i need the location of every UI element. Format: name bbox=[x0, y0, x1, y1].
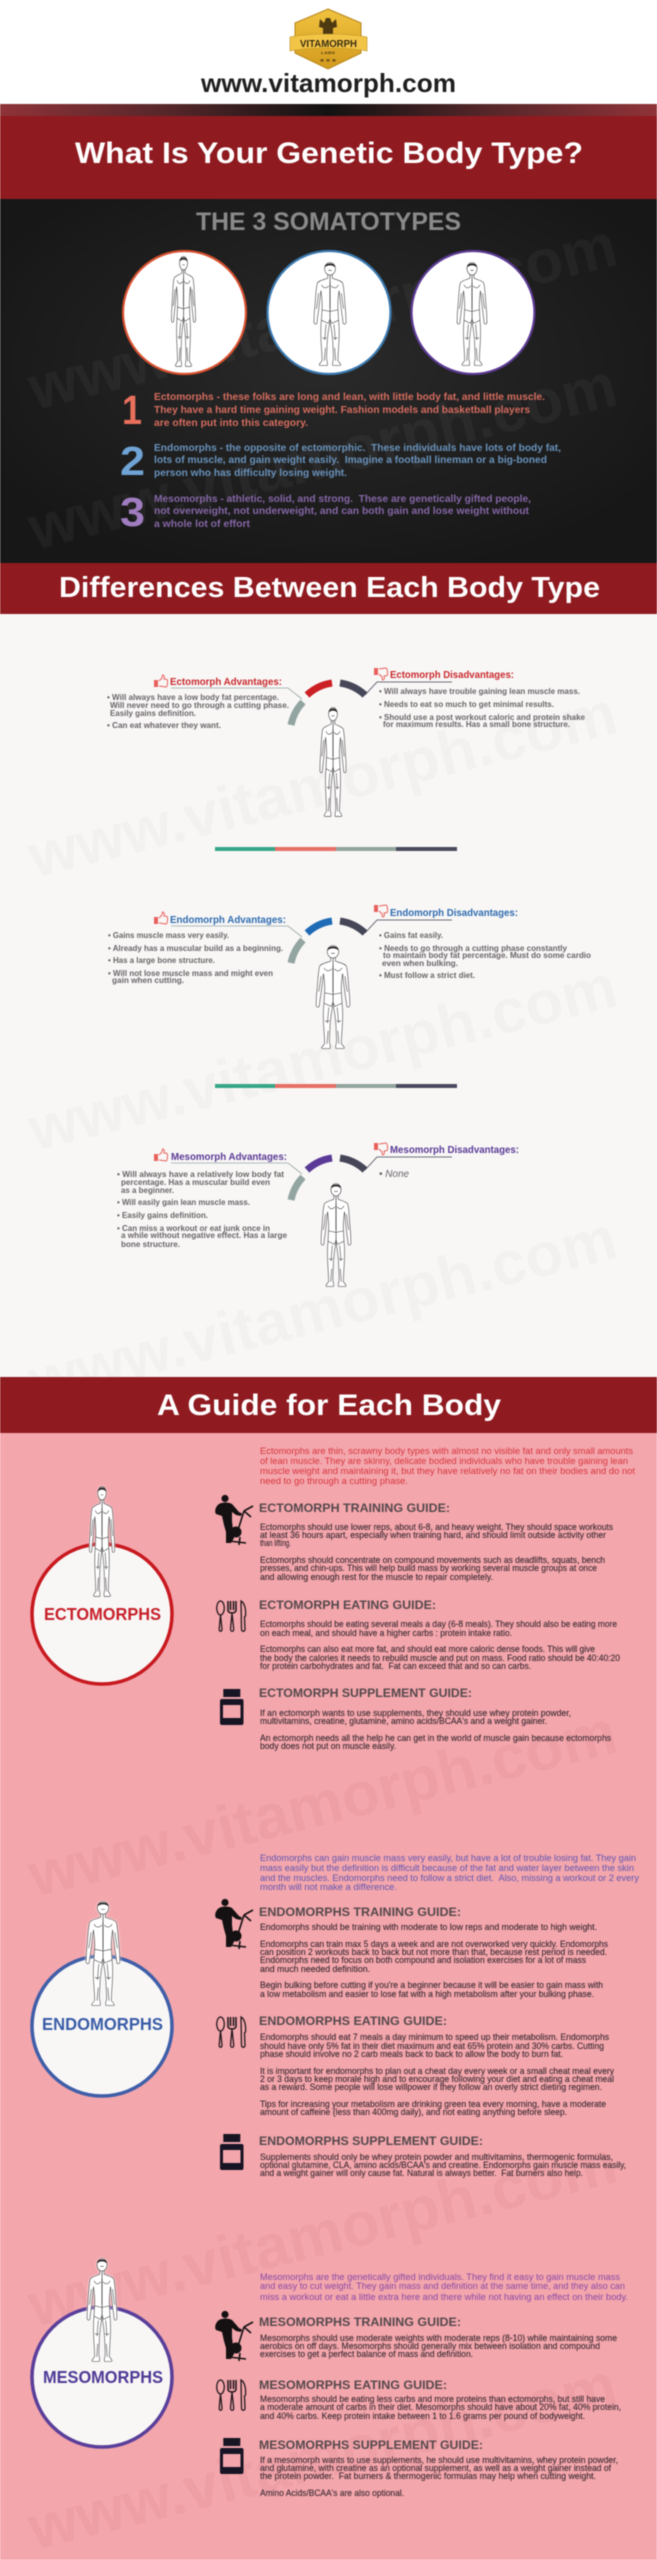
eating guide: It is important for endomorphs to plan out a cheat day every week or a small cheat meal every bbox=[260, 2066, 615, 2076]
training guide: Ectomorphs should use lower reps, about 6-8, and heavy weight. They should space workouts bbox=[260, 1522, 614, 1532]
supplement guide: MESOMORPHS SUPPLEMENT GUIDE: bbox=[259, 2439, 483, 2452]
training guide: Endomorphs need to focus on both compound and isolation exercises for a lot of mass bbox=[260, 1955, 587, 1965]
disadvantages bbox=[374, 905, 591, 980]
icon: Vitamorph Labs logo badge: LABS bbox=[321, 50, 335, 55]
icon: Vitamorph Labs logo badge bbox=[290, 9, 367, 69]
disadvantages: Ectomorph Disadvantages: bbox=[390, 670, 514, 681]
advantages: • Easily gains definition. bbox=[117, 1210, 208, 1220]
block: mesomorph pros and cons bbox=[117, 1143, 519, 1286]
advantages: • Can miss a workout or eat junk once in bbox=[117, 1223, 270, 1233]
advantages: • Gains muscle mass very easily. bbox=[108, 930, 229, 940]
heading band: a guide for each body bbox=[0, 1377, 657, 1433]
badge: endomorphs circle with figure bbox=[32, 1902, 172, 2096]
intro text bbox=[260, 1853, 639, 1893]
intro text: and easy to cut weight. They gain mass and definition at the same time, and they also can bbox=[260, 2281, 625, 2292]
badge: mesomorphs circle with figure bbox=[32, 2259, 172, 2447]
training guide: ENDOMORPHS TRAINING GUIDE: bbox=[259, 1906, 461, 1919]
eating guide: phase should involve no 2 carb meals back to back to allow the body to burn fat. bbox=[260, 2049, 563, 2059]
supplement guide: ENDOMORPHS SUPPLEMENT GUIDE: bbox=[259, 2135, 483, 2148]
item 3: mesomorphs: Mesomorphs - athletic, solid, and strong. These are genetically gifted people, bbox=[154, 493, 531, 505]
intro text: Ectomorphs are thin, scrawny body types with almost no visible fat and only small amounts bbox=[260, 1446, 633, 1457]
advantages: • Can eat whatever they want. bbox=[107, 720, 221, 730]
supplement guide: multivitamins, creatine, glutamine, amino acids/BCAA's and a weight gainer. bbox=[260, 1716, 547, 1726]
supplement guide: and glutamine, with creatine as an optional supplement, as well as a weight gainer instead of bbox=[260, 2463, 612, 2473]
section: mesomorphs guide bbox=[32, 2259, 628, 2498]
icon: Vitamorph Labs logo badge: VITAMORPH bbox=[300, 38, 357, 50]
panel: guide for each body: www.vitamorph.com bbox=[21, 2351, 623, 2560]
supplement guide bbox=[220, 1687, 612, 1751]
body figure bbox=[316, 946, 350, 1048]
intro text: of lean muscle. They are skinny, delicate bodied individuals who have trouble gaining lean bbox=[260, 1456, 628, 1467]
advantages: • Will always have a relatively low body fat bbox=[117, 1169, 284, 1179]
advantages bbox=[107, 675, 289, 730]
supplement guide: Amino Acids/BCAA's are also optional. bbox=[260, 2488, 404, 2498]
eating guide: and 40% carbs. Keep protein intake between 1 to 1.6 grams per pound of bodyweight. bbox=[260, 2411, 585, 2421]
item 2: endomorphs: 2 bbox=[120, 438, 145, 484]
eating guide: ECTOMORPH EATING GUIDE: bbox=[259, 1599, 436, 1612]
advantages: Ectomorph Advantages: bbox=[170, 677, 282, 688]
panel: the 3 somatotypes bbox=[0, 199, 657, 564]
disadvantages: even when bulking. bbox=[382, 958, 458, 968]
eating guide: for protein carbohydrates and fat. Fat can exceed that and so can carbs. bbox=[260, 1661, 531, 1671]
supplement guide: If a mesomorph wants to use supplements, he should use multivitamins, whey protein powder, bbox=[260, 2455, 618, 2465]
disadvantages bbox=[374, 1143, 519, 1180]
advantages: • Will easily gain lean muscle mass. bbox=[117, 1197, 250, 1207]
item 1: ectomorphs: are often put into this category. bbox=[154, 417, 308, 429]
item 2: endomorphs: Endomorphs - the opposite of ectomorphic. These individuals have lots of body fat, bbox=[154, 442, 561, 454]
eating guide bbox=[217, 2015, 615, 2117]
training guide: Endomorphs should be training with moderate to low reps and moderate to high weight. bbox=[260, 1922, 597, 1932]
eating guide: Endomorphs should eat 7 meals a day minimum to speed up their metabolism. Endomorphs bbox=[260, 2032, 610, 2042]
eating guide: ENDOMORPHS EATING GUIDE: bbox=[259, 2015, 447, 2028]
panel: differences between body types: www.vitamorph.com bbox=[21, 952, 623, 1165]
training guide: and much needed definition. bbox=[260, 1964, 370, 1974]
panel: guide for each body: www.vitamorph.com bbox=[21, 1698, 623, 1911]
advantages bbox=[117, 1149, 287, 1249]
arcs and leaders bbox=[171, 1157, 452, 1200]
disadvantages: Mesomorph Disadvantages: bbox=[390, 1145, 519, 1156]
training guide: MESOMORPHS TRAINING GUIDE: bbox=[259, 2316, 461, 2329]
training guide: than lifting. bbox=[260, 1538, 291, 1548]
intro text: and the muscles. Endomorphs need to follow a strict diet. Also, missing a workout or 2 every bbox=[260, 1873, 639, 1884]
intro text: need to go through a cutting phase. bbox=[260, 1476, 408, 1487]
title band bbox=[0, 116, 657, 199]
item 1: ectomorphs: 1 bbox=[122, 387, 142, 433]
training guide: ECTOMORPH TRAINING GUIDE: bbox=[259, 1502, 450, 1515]
training guide bbox=[215, 1899, 609, 1999]
advantages: Endomorph Advantages: bbox=[170, 915, 286, 926]
intro text: muscle weight and maintaining it, but they have relatively no fat on their bodies and do not bbox=[260, 1466, 635, 1477]
training guide bbox=[215, 1495, 614, 1582]
heading band: a guide for each body: A Guide for Each Body bbox=[157, 1389, 501, 1422]
training guide: Begin bulking before cutting if you're a beginner because it will be easier to gain mass with bbox=[260, 1980, 603, 1990]
supplement guide: ECTOMORPH SUPPLEMENT GUIDE: bbox=[259, 1687, 472, 1700]
gradient strip above title bbox=[0, 104, 657, 116]
disadvantages: • Gains fat easily. bbox=[379, 930, 443, 940]
eating guide: Ectomorphs should be eating several meals a day (6-8 meals). They should also be eating more bbox=[260, 1619, 617, 1629]
disadvantages: • Needs to go through a cutting phase constantly bbox=[379, 943, 567, 953]
block: ectomorph pros and cons bbox=[107, 668, 585, 851]
disadvantages: • None bbox=[379, 1169, 409, 1180]
disadvantages: Endomorph Disadvantages: bbox=[390, 908, 518, 919]
advantages: Mesomorph Advantages: bbox=[171, 1152, 287, 1163]
section: endomorphs guide bbox=[32, 1853, 639, 2178]
training guide: Mesomorphs should use moderate weights with moderate reps (8-10) while maintaining some bbox=[260, 2333, 617, 2343]
training guide: Endomorphs can train max 5 days a week and are not overworked very quickly. Endomorphs bbox=[260, 1939, 609, 1949]
supplement guide: and a weight gainer will only cause fat. Natural is always better. Fat burners also help. bbox=[260, 2168, 583, 2178]
training guide: Ectomorphs should concentrate on compound movements such as deadlifts, squats, bench bbox=[260, 1555, 605, 1565]
item 3: mesomorphs: 3 bbox=[120, 489, 145, 535]
heading band: differences: Differences Between Each Body Type bbox=[59, 572, 600, 604]
supplement guide: optional glutamine, CLA, amino acids/BCAA's and creatine. Endomorphs gain muscle mass easily, bbox=[260, 2160, 626, 2170]
item 1: ectomorphs bbox=[122, 387, 545, 433]
section: ectomorphs guide bbox=[32, 1446, 635, 1751]
supplement guide: An ectomorph needs all the help he can get in the world of muscle gain because ectomorphs bbox=[260, 1733, 612, 1743]
supplement guide: If an ectomorph wants to use supplements, they should use whey protein powder, bbox=[260, 1708, 571, 1718]
title band: What Is Your Genetic Body Type? bbox=[75, 137, 583, 170]
advantages: • Will not lose muscle mass and might even bbox=[108, 968, 273, 978]
block: endomorph pros and cons bbox=[108, 905, 591, 1088]
training guide: can position 2 workouts back to back but not more than that, because rest period is needed. bbox=[260, 1947, 607, 1957]
panel: the 3 somatotypes: www.vitamorph.com bbox=[21, 211, 623, 424]
eating guide: a moderate amount of carbs in their diet. Mesomorphs should have about 20% fat, 40% protein, bbox=[260, 2402, 621, 2412]
colour bar bbox=[215, 847, 457, 851]
disadvantages bbox=[374, 668, 585, 729]
intro text bbox=[260, 2272, 628, 2303]
body figure bbox=[320, 708, 346, 816]
eating guide: should have only 5% fat in their diet maximum and eat 65% protein and 30% carbs. Cutting bbox=[260, 2041, 604, 2051]
body figure bbox=[321, 1184, 351, 1286]
advantages: Easily gains definition. bbox=[110, 708, 196, 718]
panel: differences between body types bbox=[0, 614, 657, 1417]
disadvantages: • Should use a post workout caloric and protein shake bbox=[379, 712, 585, 722]
eating guide bbox=[217, 2379, 621, 2421]
eating guide bbox=[217, 1599, 620, 1671]
advantages: Will never need to go through a cutting phase. bbox=[110, 700, 289, 710]
panel: guide for each body: www.vitamorph.com bbox=[21, 2128, 623, 2341]
badge: mesomorphs circle with figure: MESOMORPHS bbox=[43, 2367, 163, 2387]
badge: ectomorphs circle with figure bbox=[32, 1487, 172, 1684]
panel: differences between body types: www.vitamorph.com bbox=[21, 1204, 623, 1417]
item 3: mesomorphs: a whole lot of effort bbox=[154, 518, 250, 530]
training guide bbox=[215, 2311, 617, 2361]
arcs and leaders bbox=[171, 682, 452, 725]
intro text: month will not make a difference. bbox=[260, 1882, 397, 1893]
circle: ectomorph figure bbox=[123, 251, 246, 374]
eating guide: MESOMORPHS EATING GUIDE: bbox=[259, 2379, 447, 2392]
supplement guide bbox=[220, 2134, 626, 2178]
intro text: Endomorphs can gain muscle mass very easily, but have a lot of trouble losing fat. They gain bbox=[260, 1853, 636, 1864]
item 2: endomorphs: person who has difficulty losing weight. bbox=[154, 467, 347, 479]
intro text: mass easily but the definition is difficult because of the fat and water layer between the skin bbox=[260, 1863, 634, 1874]
advantages: • Will always have a low body fat percentage. bbox=[107, 692, 279, 702]
item 1: ectomorphs: They have a hard time gaining weight. Fashion models and basketball players bbox=[154, 404, 530, 416]
advantages: as a beginner. bbox=[121, 1185, 174, 1195]
item 3: mesomorphs bbox=[120, 489, 531, 535]
item 2: endomorphs: lots of muscle, and gain weight easily. Imagine a football lineman or a big-boned bbox=[154, 454, 547, 466]
panel: guide for each body bbox=[0, 1433, 657, 2560]
disadvantages: • Will always have trouble gaining lean muscle mass. bbox=[379, 686, 580, 696]
intro text: Mesomorphs are the genetically gifted individuals. They find it easy to gain muscle mass bbox=[260, 2272, 620, 2283]
badge: endomorphs circle with figure: ENDOMORPHS bbox=[42, 2014, 163, 2034]
supplement guide: the protein powder. Fat burners & thermogenic formulas may help when cutting weight. bbox=[260, 2471, 596, 2481]
training guide: a low metabolism and easier to lose fat with a high metabolism after your bulking phase. bbox=[260, 1989, 594, 1999]
disadvantages: to maintain body fat percentage. Must do some cardio bbox=[383, 950, 591, 960]
item 3: mesomorphs: not overweight, not underweight, and can both gain and lose weight without bbox=[154, 505, 529, 517]
heading band: differences bbox=[0, 563, 657, 614]
disadvantages: • Needs to eat so much to get minimal results. bbox=[379, 699, 554, 709]
eating guide: as a reward. Some people will lose willpower if they follow an overly strict dieting regimen. bbox=[260, 2082, 602, 2092]
training guide: and allowing enough rest for the muscle to repair completely. bbox=[260, 1572, 493, 1582]
arcs and leaders bbox=[171, 920, 452, 963]
website url: www.vitamorph.com bbox=[200, 68, 456, 98]
item 2: endomorphs bbox=[120, 438, 561, 484]
supplement guide: Supplements should only be whey protein powder and multivitamins, thermogenic formulas, bbox=[260, 2152, 613, 2162]
advantages: • Already has a muscular build as a beginning. bbox=[108, 943, 283, 953]
icon: Vitamorph Labs logo badge: ★★★ bbox=[319, 58, 338, 64]
disadvantages: for maximum results. Has a small bone structure. bbox=[383, 719, 570, 729]
training guide: exercises to get a perfect balance of mass and definition. bbox=[260, 2349, 473, 2359]
eating guide: 2 or 3 days to keep morale high and to encourage following your diet and eating a cheat meal bbox=[260, 2074, 614, 2084]
colour bar bbox=[215, 1084, 457, 1088]
eating guide: Mesomorphs should be eating less carbs and more proteins than ectomorphs, but still have bbox=[260, 2394, 605, 2404]
eating guide: on each meal, and should have a higher carbs : protein intake ratio. bbox=[260, 1628, 512, 1638]
supplement guide: body does not put on muscle easily. bbox=[260, 1741, 396, 1751]
intro text: miss a workout or eat a little extra here and there while not having an effect on their body. bbox=[260, 2292, 628, 2303]
disadvantages: • Must follow a strict diet. bbox=[379, 970, 475, 980]
circle: mesomorph figure bbox=[412, 251, 534, 374]
item 1: ectomorphs: Ectomorphs - these folks are long and lean, with little body fat, and little muscle. bbox=[154, 391, 545, 403]
advantages bbox=[108, 912, 286, 985]
circle: endomorph figure bbox=[268, 251, 390, 374]
advantages: bone structure. bbox=[121, 1239, 180, 1249]
eating guide: the body the calories it needs to rebuild muscle and put on mass. Food ratio should be 40:40:20 bbox=[260, 1653, 620, 1663]
eating guide: Ectomorphs can also eat more fat, and should eat more caloric dense foods. This will give bbox=[260, 1644, 595, 1654]
badge: ectomorphs circle with figure: ECTOMORPHS bbox=[44, 1604, 161, 1624]
heading: the 3 somatotypes: THE 3 SOMATOTYPES bbox=[196, 208, 461, 236]
training guide: presses, and chin-ups. This will help build mass by working several muscle groups at once bbox=[260, 1563, 597, 1573]
advantages: gain when cutting. bbox=[112, 975, 184, 985]
intro text bbox=[260, 1446, 635, 1487]
advantages: • Has a large bone structure. bbox=[108, 955, 215, 965]
training guide: at least 36 hours apart, especially when training hard, and should limit outside activity other bbox=[260, 1530, 606, 1540]
header: logo and website bbox=[0, 0, 657, 104]
supplement guide bbox=[220, 2438, 618, 2498]
advantages: a while without negative effect. Has a large bbox=[121, 1230, 287, 1240]
training guide: aerobics on off days. Mesomorphs should generally mix between isolation and compound bbox=[260, 2341, 600, 2351]
eating guide: amount of caffeine (less than 400mg daily), and not eating anything before sleep. bbox=[260, 2107, 567, 2117]
panel: the 3 somatotypes: www.vitamorph.com bbox=[21, 351, 623, 564]
eating guide: Tips for increasing your metabolism are drinking green tea every morning, have a moderate bbox=[260, 2099, 606, 2109]
panel: differences between body types: www.vitamorph.com bbox=[21, 679, 623, 892]
advantages: percentage. Has a muscular build even bbox=[121, 1177, 270, 1187]
